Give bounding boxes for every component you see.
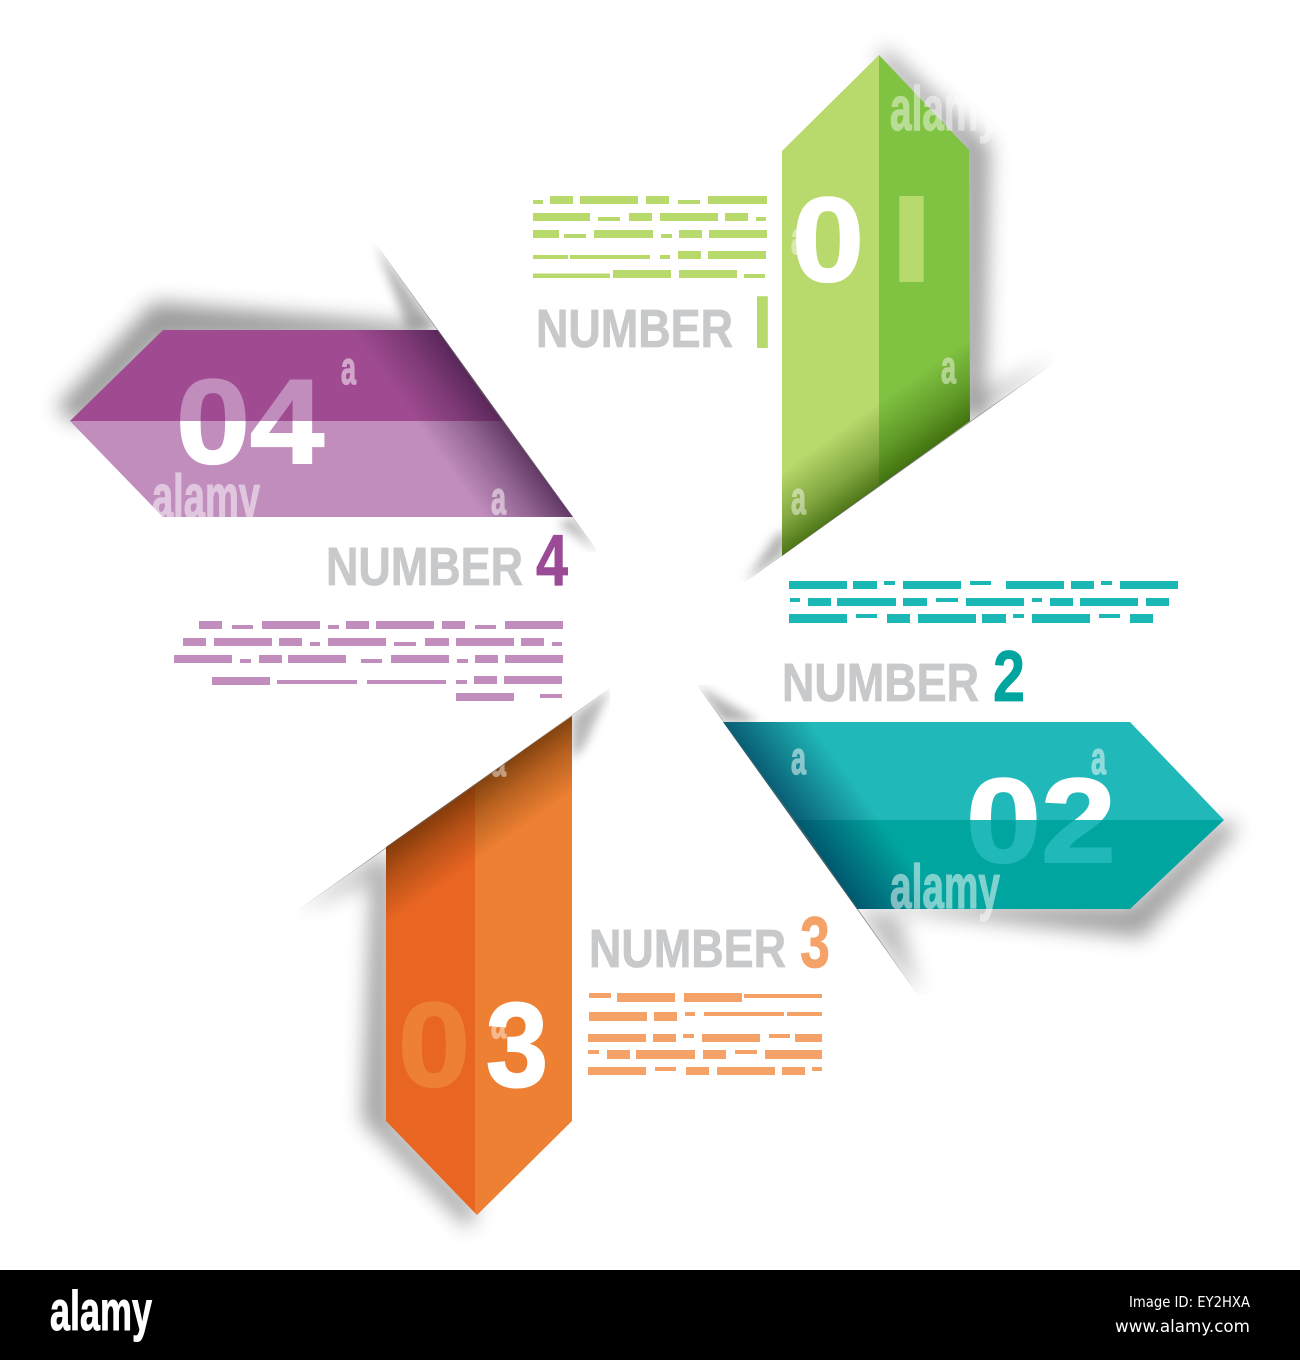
heading: NUMBER 2: NUMBER: [782, 653, 979, 713]
ribbon 3 watermark: a: [491, 996, 506, 1048]
heading: NUMBER 1: NUMBER: [536, 299, 733, 359]
text block 4 placeholder bars: [174, 621, 563, 701]
number 04: 04: [176, 355, 324, 489]
text block 3 placeholder bars: [588, 993, 822, 1075]
ribbon 3 cut edge: [298, 688, 610, 910]
number 03: 3: [486, 978, 548, 1112]
ribbon 1 right face: [879, 55, 970, 486]
ribbon 1 shadow: [745, 48, 1055, 582]
ribbon 4 shadow: [56, 244, 598, 552]
heading: NUMBER 3: 3: [800, 903, 830, 983]
ribbon 4: purple arrow: [56, 244, 598, 552]
ribbon 2 cut edge: [697, 685, 918, 995]
number 02: 02: [966, 754, 1116, 888]
ribbon 3: orange arrow: [298, 688, 610, 1228]
ribbon 1 watermark: a: [941, 341, 956, 393]
ribbon 1: green arrow: [745, 48, 1055, 582]
ribbon 3 fold shading: [386, 716, 572, 1215]
text block 1 placeholder bars: [533, 196, 767, 278]
ribbon 4 watermark: a: [341, 342, 356, 394]
text block 2 placeholder bars: [789, 581, 1178, 623]
number 01: I: [888, 170, 935, 309]
ribbon 1 fold shading: [782, 55, 970, 556]
ribbon 1 watermark: a: [791, 212, 806, 264]
footer logo: alamy: [50, 1279, 152, 1342]
ribbon 3 shadow: [298, 688, 610, 1228]
footer bar: [0, 1270, 1300, 1360]
number 03: 0: [398, 978, 470, 1112]
ribbon 2 watermark: a: [791, 732, 806, 784]
ribbon 1 left face: [782, 55, 879, 556]
ribbon 3 watermark: a: [491, 734, 506, 786]
ribbon 1 watermark: alamy: [890, 75, 1000, 144]
ribbon 3 left face: [386, 784, 475, 1213]
ribbon 4 watermark: [152, 358, 506, 517]
heading: NUMBER 3: NUMBER: [589, 919, 786, 979]
website: www.alamy.com: [1115, 1317, 1250, 1337]
ribbon 2 lower face: [793, 820, 1224, 909]
ribbon 2 watermark: [791, 732, 1106, 922]
heading: NUMBER 2: 2: [993, 637, 1025, 717]
number 02: [970, 777, 1112, 864]
ribbon 4 upper face: [70, 330, 503, 421]
ribbon 4 watermark: a: [491, 472, 506, 524]
ribbon 1 cut edge: [745, 362, 1055, 582]
image id: Image ID: EY2HXA: [1129, 1293, 1251, 1311]
ribbon 3 watermark: [491, 734, 506, 1048]
ribbon 2 watermark: a: [1091, 732, 1106, 784]
number 04: 04: [176, 355, 324, 489]
ribbon 4 lower face: [70, 421, 573, 517]
ribbon 2: teal arrow: [697, 685, 1238, 995]
ribbon 2 watermark: alamy: [890, 853, 1000, 922]
ribbon 4 fold shading: [70, 330, 573, 517]
ribbon 4 cut edge: [376, 244, 598, 552]
ribbon 1 watermark: [791, 75, 1000, 524]
ribbon 2 fold shading: [723, 722, 1224, 909]
heading: NUMBER 4: 4: [536, 521, 568, 601]
heading: NUMBER 1: I: [752, 280, 773, 364]
heading: NUMBER 4: NUMBER: [326, 537, 523, 597]
number 03: [398, 978, 548, 1112]
ribbon 2 upper face: [723, 722, 1224, 820]
ribbon 2 shadow: [697, 685, 1238, 995]
number 01: 0: [792, 173, 864, 307]
number 04: [180, 378, 324, 466]
ribbon 4 watermark: alamy: [152, 463, 260, 532]
ribbon 3 right face: [475, 716, 572, 1215]
number 02: 02: [966, 754, 1116, 888]
ribbon 1 watermark: a: [791, 472, 806, 524]
number 01: [792, 170, 935, 309]
